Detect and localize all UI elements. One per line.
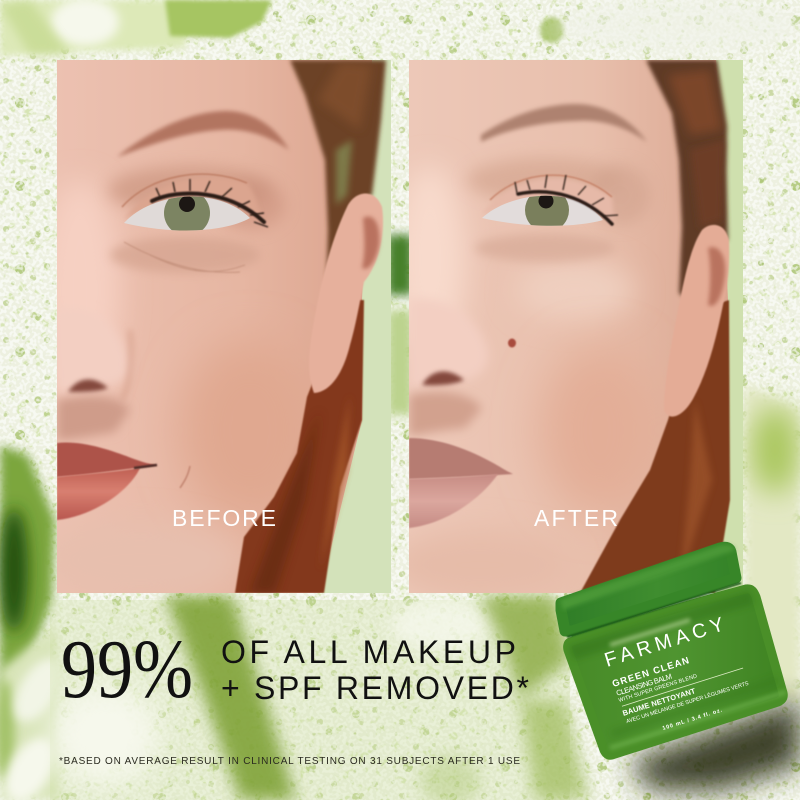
jar label: AVEC UN MÉLANGE DE SUPER LÉGUMES VERTS bbox=[625, 680, 750, 725]
ear bbox=[664, 225, 729, 417]
eye socket bbox=[108, 166, 272, 214]
eye socket bbox=[467, 158, 623, 202]
jar body bbox=[568, 589, 783, 755]
headline: OF ALL MAKEUP bbox=[221, 634, 516, 670]
upper eyelid bbox=[508, 178, 613, 214]
jar label: FARMACY bbox=[602, 613, 727, 672]
product: green jar bbox=[560, 545, 786, 755]
hair lower bbox=[235, 300, 364, 593]
eye bbox=[482, 196, 603, 226]
jar label: 100 mL / 3.4 fl. oz. bbox=[662, 707, 723, 732]
nostril bbox=[422, 372, 464, 385]
label: before: BEFORE bbox=[172, 505, 276, 531]
nostril bbox=[68, 379, 108, 392]
ear bbox=[309, 193, 383, 393]
cheek crease bbox=[122, 330, 131, 400]
skin tone variation bbox=[57, 183, 124, 330]
hair lower bbox=[580, 300, 730, 593]
jar label bbox=[602, 612, 755, 742]
footnote: *BASED ON AVERAGE RESULT IN CLINICAL TESTING ON 31 SUBJECTS AFTER 1 USE bbox=[59, 756, 520, 767]
eyebrow bbox=[117, 111, 289, 157]
headline: + SPF REMOVED* bbox=[221, 670, 529, 706]
jar label: GREEN CLEAN bbox=[611, 655, 691, 690]
lips bbox=[409, 438, 513, 479]
jar lid bbox=[561, 547, 736, 631]
right pale green patch bbox=[745, 385, 800, 700]
skin tone variation bbox=[409, 167, 470, 308]
statistic: 99%: 99% bbox=[61, 623, 193, 716]
bottom foam tint bbox=[50, 600, 570, 800]
headline bbox=[221, 634, 529, 706]
panel: before photo bbox=[40, 60, 391, 600]
lashes bbox=[518, 192, 612, 224]
eyebrow bbox=[481, 104, 647, 142]
jar label: BAUME NETTOYANT bbox=[621, 686, 697, 718]
under-eye wrinkles bbox=[124, 242, 245, 272]
lashes bbox=[152, 193, 264, 222]
pale green backdrop bbox=[320, 60, 391, 593]
mole bbox=[508, 338, 516, 348]
eye bbox=[124, 196, 250, 230]
top right whitening bbox=[560, 0, 800, 53]
upper eyelid bbox=[126, 181, 256, 218]
pale green backdrop bbox=[712, 60, 743, 593]
panel: after photo bbox=[390, 60, 743, 600]
left dark green patch bbox=[0, 445, 55, 700]
hair upper bbox=[646, 60, 728, 300]
shadow under jar bbox=[630, 700, 800, 790]
hair upper bbox=[290, 60, 386, 300]
gap between panels bbox=[391, 226, 409, 304]
jar label: CLEANSING BALM bbox=[615, 672, 673, 698]
lips bbox=[57, 443, 157, 477]
nose bbox=[99, 338, 128, 385]
top soft green area bbox=[0, 0, 190, 56]
label: after: AFTER bbox=[534, 505, 618, 531]
jar label: WITH SUPER GREENS BLEND bbox=[618, 674, 698, 704]
nose bbox=[412, 302, 488, 384]
bottom green streaks bbox=[165, 595, 296, 800]
